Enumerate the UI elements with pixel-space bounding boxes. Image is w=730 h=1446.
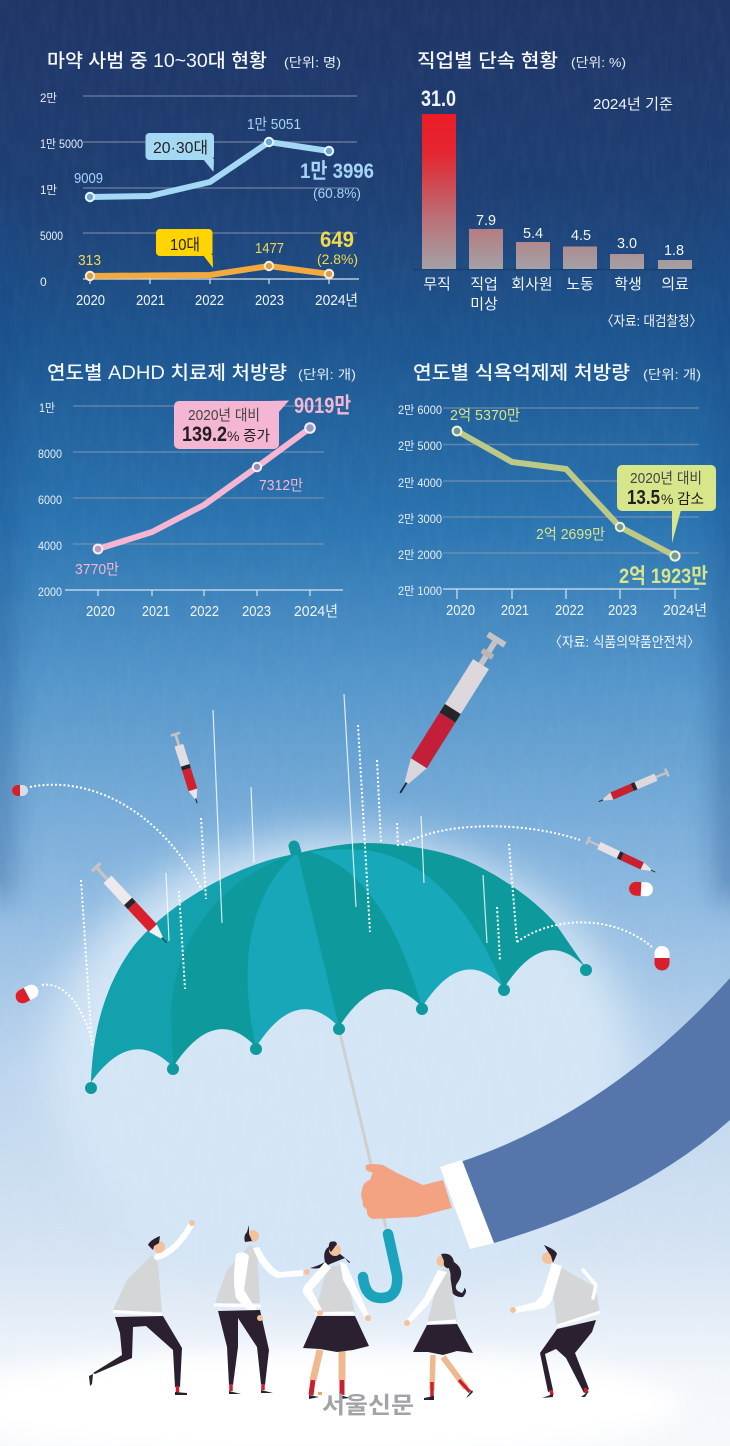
bar categories: 미상 <box>470 296 498 313</box>
bar values: 1.8 <box>664 242 684 259</box>
source: 〈자료: 대검찰청〉 <box>601 313 702 329</box>
icon: pill right upper <box>629 881 653 897</box>
callout: increase: 2020년 대비 <box>188 407 260 424</box>
icon: pill top left <box>12 785 28 796</box>
y axis labels: 5000 <box>40 229 63 243</box>
x axis labels: 2024년 <box>294 603 338 620</box>
callout: teens <box>156 229 213 268</box>
x axis labels: 2023 <box>242 603 271 620</box>
y axis labels: 2000 <box>38 585 62 599</box>
x axis labels: 2021 <box>136 292 165 309</box>
data labels: 2억 2699만 <box>536 526 605 543</box>
callout: teens: 10대 <box>170 236 200 254</box>
x axis labels: 2020 <box>446 602 475 619</box>
bar chart <box>413 114 697 270</box>
callout: increase <box>174 400 289 449</box>
line chart <box>453 427 680 561</box>
heading: 직업별 단속 현황 <box>417 50 558 72</box>
x axis labels: 2022 <box>190 603 219 620</box>
x axis labels: 2024년 <box>315 292 358 309</box>
y axis labels: 2만 6000 <box>398 403 442 417</box>
bar values: 31.0 <box>421 86 456 111</box>
callout: decrease <box>617 465 716 543</box>
data labels: 3770만 <box>75 561 119 578</box>
panel: drug offenders aged 10-30 <box>40 50 374 309</box>
y axis labels: 8000 <box>38 447 62 461</box>
callout: decrease: 2020년 대비 <box>630 470 702 487</box>
bar categories: 무직 <box>423 276 451 293</box>
icon: small syringe right upper <box>597 768 670 806</box>
bar values <box>421 86 684 259</box>
line chart <box>94 423 315 553</box>
bar categories <box>423 276 689 313</box>
callout: decrease: 감소 <box>677 491 704 508</box>
data labels <box>75 393 351 578</box>
y axis labels: 2만 3000 <box>398 512 442 526</box>
x axis labels <box>446 602 707 619</box>
bar values: 7.9 <box>476 212 496 229</box>
icon: large syringe <box>392 632 507 798</box>
y axis labels: 1만 <box>39 401 55 415</box>
icon: pill left <box>13 982 41 1006</box>
canopy silhouette with dark panels <box>91 843 586 1082</box>
icon: small syringe right lower <box>585 836 657 876</box>
y axis labels: 1만 <box>40 183 57 197</box>
y axis labels: 2만 1000 <box>398 584 442 598</box>
y axis labels: 6000 <box>38 493 62 507</box>
callout: decrease: 13.5 <box>627 487 660 509</box>
bar values: 5.4 <box>523 225 543 242</box>
illustration: umbrella canopy <box>85 843 592 1094</box>
data labels: 2억 5370만 <box>450 407 520 424</box>
source: 〈자료: 식품의약품안전처〉 <box>549 634 700 650</box>
illustration: white cuff <box>440 1160 494 1249</box>
bar categories: 직업 <box>470 276 498 293</box>
data labels: 9019만 <box>294 393 351 418</box>
y axis labels <box>40 91 83 289</box>
data labels: teens: (2.8%) <box>317 251 358 267</box>
bar values: 3.0 <box>617 235 637 252</box>
y axis labels: 4000 <box>38 539 62 553</box>
line chart: ages 20-30 <box>86 138 333 201</box>
x axis labels: 2022 <box>555 602 584 619</box>
x axis labels: 2024년 <box>663 602 707 619</box>
data labels: (60.8%) <box>313 185 361 201</box>
data labels: 9009 <box>74 170 103 187</box>
data labels: 7312만 <box>259 477 303 494</box>
x axis labels: 2021 <box>142 603 170 620</box>
unit: (단위: %) <box>571 55 626 70</box>
x axis labels: 2023 <box>608 602 637 619</box>
x axis labels <box>86 603 338 620</box>
x axis labels: 2020 <box>76 292 105 309</box>
data labels <box>74 116 374 201</box>
callout: 20·30s: 20·30대 <box>153 139 208 157</box>
unit: (단위: 개) <box>298 367 356 382</box>
y axis labels: 2만 <box>40 91 57 105</box>
x axis labels: 2023 <box>255 292 284 309</box>
icon: pill right lower <box>654 946 670 970</box>
data labels: 1만 5051 <box>247 116 301 133</box>
panel: appetite suppressant prescriptions <box>398 362 716 650</box>
y axis labels: 0 <box>40 275 47 289</box>
line chart: teens <box>86 262 333 280</box>
bar categories: 노동 <box>566 276 594 293</box>
bar values: 4.5 <box>571 227 591 244</box>
bar categories: 회사원 <box>511 276 553 293</box>
panel: ADHD medication prescriptions <box>38 362 356 620</box>
data labels <box>450 407 708 588</box>
watermark logo: 서울신문 <box>322 1392 414 1418</box>
illustration: umbrella shaft <box>339 1029 386 1228</box>
y axis labels: 1만 5000 <box>40 137 83 151</box>
bar categories: 학생 <box>614 276 642 293</box>
heading: 마약 사범 중 10~30대 현황 <box>47 50 267 72</box>
callout: decrease: % <box>661 491 673 507</box>
bar categories: 의료 <box>661 276 689 293</box>
illustration: rain lines <box>166 694 487 943</box>
unit: (단위: 명) <box>284 55 341 70</box>
callout: 20·30s <box>146 133 214 172</box>
unit: (단위: 개) <box>643 367 701 382</box>
illustration: suit sleeve <box>460 978 730 1243</box>
person 4 <box>404 1254 473 1400</box>
y axis labels: 2만 5000 <box>398 439 442 453</box>
canopy nub <box>294 846 296 853</box>
callout: increase: 증가 <box>243 428 270 445</box>
illustration: dotted paths <box>30 725 652 1047</box>
data labels: teens: 313 <box>78 252 101 269</box>
y axis labels <box>38 401 62 599</box>
x axis labels: 2022 <box>195 292 224 309</box>
callout: increase: % <box>227 428 239 444</box>
heading: 연도별 식욕억제제 처방량 <box>413 362 630 384</box>
person 3 <box>303 1241 371 1399</box>
light panel right <box>310 849 504 1007</box>
data labels: teens: 1477 <box>255 240 284 257</box>
icon: syringe on umbrella <box>91 862 171 947</box>
y axis labels: 2만 4000 <box>398 476 442 490</box>
illustration: hand <box>361 1164 452 1219</box>
data labels: 1만 3996 <box>300 160 374 183</box>
callout: increase: 139.2 <box>182 423 227 446</box>
heading: 연도별 ADHD 치료제 처방량 <box>47 362 287 384</box>
illustration: umbrella hook handle <box>363 1234 397 1298</box>
note: 2024년 기준 <box>593 96 673 113</box>
x axis labels <box>76 292 358 309</box>
data labels: 2억 1923만 <box>619 565 708 588</box>
person 5 <box>510 1245 600 1398</box>
y axis labels <box>398 403 442 598</box>
panel: arrests by occupation <box>413 50 702 329</box>
light panel left <box>91 855 290 1082</box>
x axis labels: 2021 <box>501 602 529 619</box>
tips <box>85 964 592 1094</box>
light panel centre <box>248 855 339 1047</box>
person 2 <box>214 1225 310 1394</box>
x axis labels: 2020 <box>86 603 115 620</box>
y axis labels: 2만 2000 <box>398 548 442 562</box>
data labels: teens <box>78 227 358 269</box>
person 1 <box>89 1220 195 1395</box>
data labels: teens: 649 <box>320 227 354 252</box>
icon: small syringe top left <box>170 732 202 805</box>
